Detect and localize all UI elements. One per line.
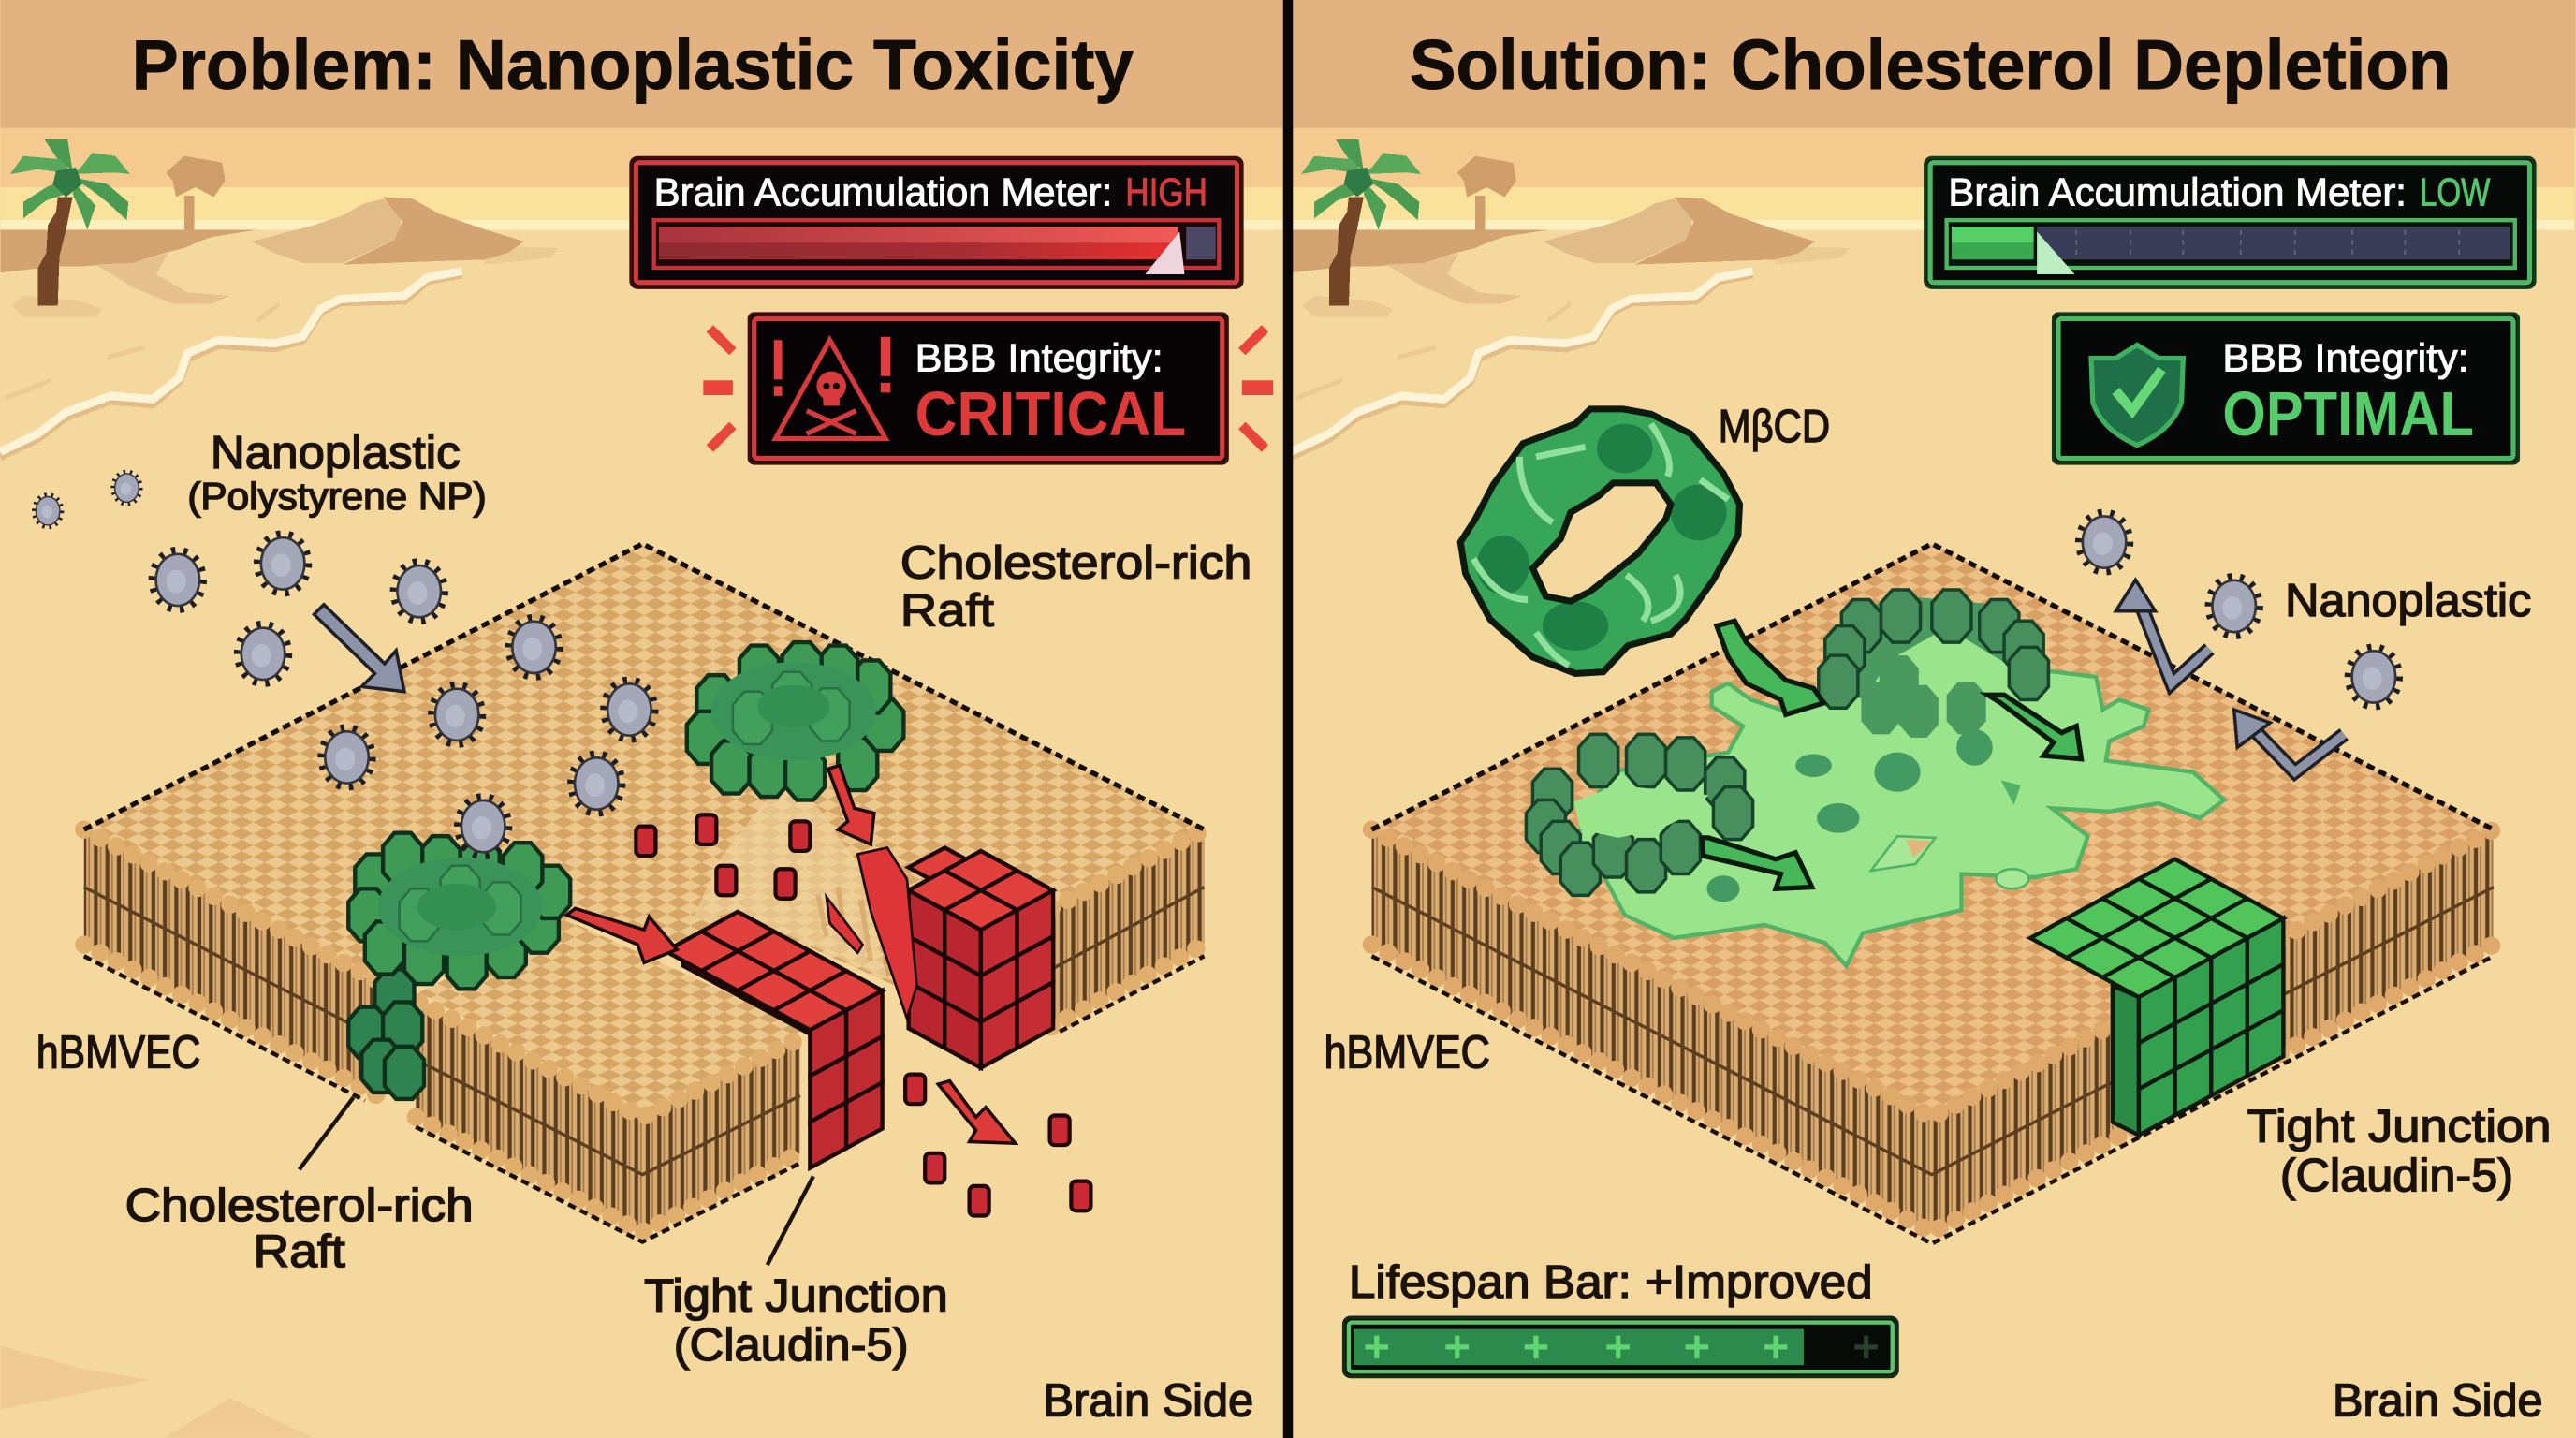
nanoplastic particles: left [34, 472, 655, 814]
meter pointer [2037, 231, 2075, 274]
red shards [827, 847, 916, 1019]
leader lines left [300, 1097, 813, 1265]
cholesterol raft: upper depleted [1819, 590, 2048, 738]
label: cholesterol-rich raft lower [125, 1181, 474, 1277]
desert scene: left [0, 128, 1283, 457]
icon: shield check [2091, 345, 2183, 446]
label: cholesterol-rich raft top: Raft [900, 586, 994, 637]
front surface [419, 920, 805, 1117]
label: MβCD: MβCD [1719, 402, 1830, 452]
depleted zone: green splotch [1567, 611, 2224, 966]
label: brain side right: Brain Side [2333, 1376, 2543, 1427]
label: nanoplastic polystyrene: (Polystyrene NP) [187, 475, 487, 518]
crack [690, 788, 887, 979]
label: nanoplastic polystyrene [187, 428, 487, 518]
icon: alarm burst marks [703, 329, 1273, 448]
tight junction: intact block [2030, 859, 2283, 1136]
panel: BBB integrity critical [749, 314, 1227, 463]
bounce arrows [2115, 580, 2344, 772]
label: hBMVEC left: hBMVEC [37, 1028, 200, 1078]
cholesterol raft: upper [687, 642, 903, 800]
label: cholesterol-rich raft lower: Cholesterol-rich [125, 1181, 474, 1231]
cholesterol raft: lower depleted [1526, 734, 1753, 895]
background dunes bottom left [0, 1345, 313, 1437]
panel: BBB integrity optimal: BBB Integrity: [2222, 336, 2469, 380]
membrane: healthy bilayer [1371, 544, 2494, 1243]
nanoplastic on raft [458, 797, 508, 856]
back surface [84, 544, 1205, 986]
desert scene: right [1292, 128, 2574, 457]
right side lipid tails [1051, 829, 1205, 1027]
label: cholesterol-rich raft top: Cholesterol-rich [900, 538, 1251, 589]
label: nanoplastic right: Nanoplastic [2285, 576, 2531, 626]
tight junction: broken front block [666, 912, 883, 1168]
front side lipid tails [416, 1002, 642, 1232]
panel: BBB integrity critical: CRITICAL [915, 380, 1186, 449]
nanoplastic particles: right [2079, 512, 2399, 707]
label: lifespan: Lifespan Bar: +Improved [1349, 1257, 1873, 1308]
panel: BBB integrity optimal: OPTIMAL [2222, 380, 2474, 449]
lifespan bar [1344, 1257, 1897, 1376]
membrane: damaged bilayer [84, 544, 1205, 1242]
green arrows [1702, 621, 2082, 888]
label: tight junction left: Tight Junction [644, 1270, 948, 1321]
panel: brain accumulation meter high: HIGH [1125, 169, 1208, 213]
title: problem: Problem: Nanoplastic Toxicity [132, 25, 1134, 104]
panel: BBB integrity optimal [2054, 314, 2518, 463]
label: hBMVEC right: hBMVEC [1325, 1028, 1490, 1078]
cholesterol raft: lower [348, 833, 570, 1099]
tight junction: broken back block [909, 847, 1053, 1068]
panel: brain accumulation meter high: Brain Accumulation Meter: [654, 169, 1112, 213]
label: tight junction right: Tight Junction [2247, 1102, 2551, 1152]
label: tight junction left: (Claudin-5) [674, 1320, 909, 1371]
left side lipid tails [84, 829, 381, 1097]
icon: MβCD ring [1460, 409, 1740, 673]
panel: brain accumulation meter low: LOW [2420, 169, 2491, 213]
panel: BBB integrity critical: BBB Integrity: [915, 336, 1164, 380]
leaking particles [636, 814, 1090, 1215]
label: cholesterol-rich raft top [900, 538, 1251, 637]
icon: skull warning triangle [774, 337, 890, 439]
label: cholesterol-rich raft lower: Raft [254, 1226, 345, 1277]
panel: brain accumulation meter low: Brain Accumulation Meter: [1948, 169, 2407, 213]
red arrows [567, 766, 1016, 1143]
panel: brain accumulation meter high [631, 157, 1242, 287]
panel: brain accumulation meter low [1925, 157, 2535, 287]
title: solution: Solution: Cholesterol Depletion [1410, 25, 2451, 104]
label: tight junction right: (Claudin-5) [2280, 1151, 2513, 1201]
label: brain side left: Brain Side [1044, 1376, 1253, 1427]
arrow: nanoplastic entering [314, 605, 404, 692]
label: tight junction right [2247, 1102, 2551, 1201]
panel divider [1283, 0, 1293, 1438]
label: nanoplastic polystyrene: Nanoplastic [211, 428, 461, 478]
label: tight junction left [644, 1270, 948, 1371]
meter pointer [1145, 231, 1184, 274]
